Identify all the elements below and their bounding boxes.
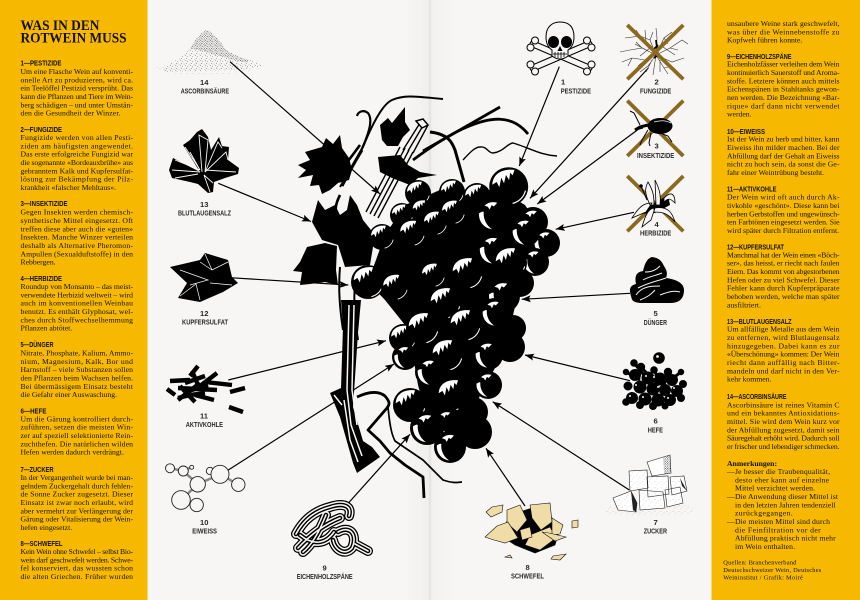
- text block: 10 Eiweiss: Eiweiss ihn milder machen. Bei der: [727, 143, 840, 152]
- text block: 13 Blutlaugensalz: kehr kommen.: [727, 375, 771, 384]
- text block: 1 Pestizide: kann die Pflanzen und Tiere im Wein-: [20, 92, 133, 101]
- label: 9 Eichenholzspäne: 9: [322, 563, 327, 572]
- text block: 5 Dünger: 5—DÜNGER: [20, 340, 54, 349]
- icon: 10 protein molecule: [166, 464, 245, 512]
- text block: 10 Eiweiss: Abfüllung darf der Gehalt an Eiweiss: [727, 151, 840, 160]
- text block: 5 Dünger: den Pflanzen beim Wachsen helfen.: [20, 374, 133, 382]
- text block: 8 Schwefel continued: [727, 19, 840, 45]
- icon: 14 ascorbic acid powder: [155, 30, 264, 75]
- arrow: 8 to grapes: [486, 448, 525, 506]
- text block: 12 Kupfersulfat: ser», das heisst, er riecht nach faulen: [727, 259, 840, 268]
- text block: 10 Eiweiss: Ist der Wein zu herb und bitter, kann: [727, 135, 840, 144]
- text block: 1 Pestizide: Um eine Flasche Wein auf konventi-: [20, 67, 133, 76]
- text block: Anmerkungen: Abfüllung praktisch nicht mehr: [735, 534, 836, 543]
- text block: 4 Herbizide: auch im konventionellen Weinbau: [20, 299, 133, 308]
- text block: 4 Herbizide: [20, 274, 133, 333]
- label: 8 Schwefel: [511, 563, 544, 581]
- text block: 7 Zucker: Gärung oder Vitalisierung der Wein-: [20, 515, 133, 524]
- text block: Anmerkungen: Anmerkungen:: [727, 459, 777, 468]
- label: 7 Zucker: [644, 518, 667, 536]
- text block: 9 Eichenholzspäne: rique» darf dann nicht verwendet: [727, 101, 840, 110]
- text block: 3 Insektizide: Rebbergen.: [20, 258, 56, 267]
- icon: 11 activated charcoal: [167, 366, 245, 412]
- text block: 7 Zucker: hefen eingesetzt.: [20, 523, 72, 532]
- text block: 2 Fungizide: Das erste erfolgreiche Fungizid war: [20, 150, 133, 159]
- text block: 6 Hefe: zuchthefen. Die natürlichen wilden: [20, 439, 133, 448]
- text block: 6 Hefe: Um die Gärung kontrolliert durch-: [20, 414, 133, 423]
- label: 9 Eichenholzspäne: [297, 563, 353, 581]
- text block: 12 Kupfersulfat: behoben werden, welche man später: [727, 292, 840, 301]
- vine trunk: [330, 300, 380, 473]
- text block: 9 Eichenholzspäne: Eichenholzfässer verleihen dem Wein: [727, 60, 840, 69]
- arrow: 1 to grapes: [519, 67, 559, 166]
- label: 3 Insektizide: 3: [654, 142, 659, 150]
- text block: 9 Eichenholzspäne: 9—EICHENHOLZSPÄNE: [727, 52, 792, 61]
- text block: 13 Blutlaugensalz: hinzugegeben. Dabei kann es zur: [727, 341, 840, 350]
- label: 1 Pestizide: [561, 78, 591, 96]
- text block: 3 Insektizide: treffen diese aber auch die «guten»: [20, 224, 133, 233]
- text block: 1 Pestizide: ein Teelöffel Pestizid versprüht. Das: [20, 84, 133, 93]
- text block: Anmerkungen: Je besser die Traubenqualität,: [735, 467, 830, 476]
- label: 13 Blutlaugensalz: [178, 200, 231, 218]
- text block: 6 Hefe: 6—HEFE: [20, 406, 46, 416]
- text block: 1 Pestizide: 1—PESTIZIDE: [20, 58, 62, 68]
- text block: Anmerkungen: desto eher kann auf einzelne: [735, 475, 830, 484]
- text block: 3 Insektizide: deshalb als Alternative Pheromon-: [20, 241, 133, 250]
- arrow: 12 to grapes: [230, 278, 348, 285]
- text block: 1 Pestizide: den die Gesundheit der Winzer.: [20, 109, 121, 118]
- arrow: 9 to grapes: [347, 434, 410, 505]
- text block: 14 Ascorbinsäure: der Abfüllung zugesetzt, damit sein: [727, 425, 840, 434]
- text block: 2 Fungizide: Fungizide werden von allen Pesti-: [20, 133, 133, 142]
- text block: 9 Eichenholzspäne: nen werden. Die Bezeichnung «Bar-: [727, 93, 840, 102]
- text block: 13 Blutlaugensalz: riecht dann auffällig nach Bitter-: [727, 358, 840, 367]
- text block: 4 Herbizide: Roundup von Monsanto – das meist-: [20, 282, 133, 291]
- right yellow text column: [712, 0, 860, 600]
- text block: 8 Schwefel: Kein Wein ohne Schwefel – selbst Bio-: [20, 547, 133, 556]
- label: 3 Insektizide: [637, 142, 674, 160]
- label: 14 Ascorbinsäure: 14: [200, 78, 209, 87]
- text block: 1 Pestizide: [20, 58, 133, 118]
- central illustration: grape vine: [293, 96, 560, 498]
- text block: 4 Herbizide: verwendete Herbizid weltweit – wird: [20, 290, 133, 299]
- text block: 2 Fungizide: 2—FUNGIZIDE: [20, 125, 62, 134]
- icon: 3 insect crossed out: [627, 101, 683, 156]
- text block: 2 Fungizide: gebranntem Kalk und Kupfersulfat-: [20, 166, 133, 175]
- arrow: 4 to grapes: [556, 212, 634, 229]
- text block: 12 Kupfersulfat: Eiern. Das kommt von abgestorbenen: [727, 267, 840, 276]
- text block: 9 Eichenholzspäne: werden.: [727, 110, 752, 119]
- label: 7 Zucker: 7: [654, 518, 658, 527]
- text block: 3 Insektizide: Insekten. Manche Winzer verteilen: [20, 233, 133, 242]
- sources credit: [723, 560, 822, 582]
- text block: 8 Schwefel: die alten Griechen. Früher wurden: [20, 572, 133, 581]
- icon: 4 herb crossed out: [627, 176, 683, 231]
- text block: 6 Hefe: zer auf speziell selektionierte Rein-: [20, 431, 133, 440]
- text block: Anmerkungen: Die Anwendung dieser Mittel ist: [735, 492, 839, 501]
- text block: 14 Ascorbinsäure: 14—ASCORBINSÄURE: [727, 392, 786, 401]
- label: 6 Hefe: HEFE: [648, 425, 663, 434]
- text block: 7 Zucker: [20, 465, 133, 532]
- arrow: 10 to grapes: [228, 364, 394, 470]
- text block: 12 Kupfersulfat: [727, 242, 840, 309]
- text block: 5 Dünger: die Gefahr einer Auswaschung.: [20, 390, 117, 399]
- arrow: 14 to grapes: [230, 62, 380, 194]
- text block: 13 Blutlaugensalz: mandeln und darf nicht in den Ver-: [727, 366, 840, 375]
- label: 4 Herbizide: 4: [654, 220, 660, 229]
- sources credit: Quellen: Branchenverband: [723, 560, 797, 566]
- title: WAS IN DEN: [20, 18, 100, 34]
- icon: 12 copper sulfate crystal: [170, 253, 238, 302]
- text block: 4 Herbizide: 4—HERBIZIDE: [20, 274, 62, 283]
- text block: 12 Kupfersulfat: 12—KUPFERSULFAT: [727, 242, 784, 252]
- text block: 11 Aktivkohle: tivkohle «geschönt». Diese kann bei: [727, 201, 840, 210]
- text block: 5 Dünger: Bei übermässigem Einsatz besteht: [20, 382, 134, 391]
- text block: Anmerkungen: die Feinfiltration vor der: [735, 525, 821, 534]
- text block: 9 Eichenholzspäne: stoffe. Letztere können auch mittels: [727, 76, 840, 85]
- text block: Anmerkungen: —: [726, 467, 735, 476]
- icon: 1 skull and crossbones: [527, 22, 595, 75]
- label: 14 Ascorbinsäure: ASCORBINSÄURE: [181, 87, 229, 96]
- text block: Anmerkungen: Mittel verzichtet werden.: [735, 484, 815, 493]
- text block: 2 Fungizide: lösung zur Bekämpfung der Pilz-: [20, 175, 133, 184]
- text block: Anmerkungen: im Wein enthalten.: [735, 542, 795, 551]
- text block: 3 Insektizide: [20, 199, 134, 267]
- label: 9 Eichenholzspäne: EICHENHOLZSPÄNE: [297, 572, 353, 581]
- text block: 1 Pestizide: onelle Art zu produzieren, wird ca.: [20, 75, 133, 84]
- text block: 2 Fungizide: ziden am häufigsten angewendet.: [20, 141, 133, 150]
- label: 6 Hefe: 6: [654, 417, 658, 426]
- text block: 11 Aktivkohle: Der Wein wird oft auch durch Ak-: [727, 193, 840, 202]
- text block: 11 Aktivkohle: [727, 184, 840, 235]
- text block: 12 Kupfersulfat: Fehler kann durch Kupferpräparate: [727, 284, 840, 293]
- label: 8 Schwefel: SCHWEFEL: [511, 572, 544, 581]
- text block: 3 Insektizide: Gegen Insekten werden chemisch-: [20, 208, 133, 217]
- text block: 4 Herbizide: ches durch Stoffwechselhemmung: [20, 315, 133, 324]
- text block: 14 Ascorbinsäure: und ein bekanntes Antioxidations-: [727, 409, 840, 418]
- text block: Anmerkungen: Die meisten Mittel sind durch: [735, 517, 830, 526]
- text block: 13 Blutlaugensalz: 13—BLUTLAUGENSALZ: [727, 317, 792, 326]
- text block: 6 Hefe: Hefen werden dadurch verdrängt.: [20, 448, 124, 457]
- text block: 8 Schwefel continued: unsaubere Weine stark geschwefelt,: [727, 19, 840, 28]
- text block: 8 Schwefel continued: Kopfweh führen konnte.: [727, 36, 802, 45]
- text block: Anmerkungen: zurückgegangen.: [735, 509, 793, 518]
- text block: 8 Schwefel: 8—SCHWEFEL: [20, 539, 63, 548]
- text block: 11 Aktivkohle: 11—AKTIVKOHLE: [727, 184, 776, 194]
- label: 4 Herbizide: [640, 220, 671, 238]
- arrow: 5 to grapes: [522, 293, 630, 299]
- text block: 7 Zucker: 7—ZUCKER: [20, 465, 54, 474]
- title: ROTWEIN MUSS: [20, 31, 126, 47]
- icon: 2 fungus roots crossed out: [620, 25, 688, 79]
- text block: 10 Eiweiss: [727, 127, 840, 177]
- text block: 14 Ascorbinsäure: mittel. Sie wird dem Wein kurz vor: [727, 417, 840, 426]
- text block: 11 Aktivkohle: ten Farbtönen eingesetzt werden. Sie: [727, 218, 840, 227]
- text block: 14 Ascorbinsäure: Säuregehalt erhöht wird. Dadurch soll: [727, 434, 840, 443]
- text block: Anmerkungen: —: [726, 492, 735, 501]
- text block: 13 Blutlaugensalz: [727, 317, 840, 384]
- text block: 5 Dünger: Harnstoff – viele Substanzen sollen: [20, 365, 133, 374]
- text block: 7 Zucker: Einsatz ist zwar noch erlaubt, wird: [20, 498, 133, 507]
- text block: 8 Schwefel: [20, 539, 133, 581]
- label: 1 Pestizide: 1: [561, 78, 566, 86]
- label: 13 Blutlaugensalz: 13: [200, 200, 208, 209]
- grape cluster: [351, 167, 560, 463]
- label: 5 Dünger: 5: [654, 309, 658, 318]
- text block: 10 Eiweiss: 10—EIWEISS: [727, 127, 765, 136]
- label: 2 Fungizide: FUNGIZIDE: [640, 87, 671, 96]
- arrow: 13 to grapes: [218, 183, 311, 222]
- label: 11 Aktivkohle: 11: [200, 411, 209, 420]
- text block: 7 Zucker: gelndem Zuckergehalt durch fehlen-: [20, 481, 133, 490]
- text block: Anmerkungen: in den letzten Jahren tendenziell: [735, 500, 836, 509]
- label: 10 Eiweiss: [192, 518, 217, 536]
- text block: 2 Fungizide: krankheit «falscher Mehltaus».: [20, 183, 116, 192]
- text block: 7 Zucker: In der Vergangenheit wurde bei man-: [20, 473, 133, 482]
- label: 6 Hefe: [648, 417, 663, 434]
- label: 11 Aktivkohle: [186, 411, 223, 429]
- text block: 7 Zucker: aber vermehrt zur Verlängerung der: [20, 506, 133, 515]
- arrow: 11 to grapes: [228, 341, 386, 380]
- text block: 6 Hefe: zuführen, setzen die meisten Win-: [20, 423, 133, 432]
- arrow: 6 to grapes: [525, 355, 630, 381]
- text block: 11 Aktivkohle: wird später durch Filtration entfernt.: [727, 226, 839, 235]
- text block: 4 Herbizide: Pflanzen abtötet.: [20, 324, 72, 333]
- label: 12 Kupfersulfat: KUPFERSULFAT: [182, 318, 228, 327]
- left yellow text column: [0, 0, 148, 600]
- label: 3 Insektizide: INSEKTIZIDE: [637, 151, 674, 160]
- text block: 2 Fungizide: [20, 125, 133, 192]
- text block: 14 Ascorbinsäure: [727, 392, 840, 451]
- label: 10 Eiweiss: EIWEISS: [192, 527, 217, 536]
- label: 5 Dünger: [644, 309, 667, 327]
- text block: 13 Blutlaugensalz: «Überschönung» kommen: Der Wein: [727, 350, 840, 359]
- label: 14 Ascorbinsäure: [181, 78, 229, 96]
- text block: 5 Dünger: [20, 340, 134, 399]
- arrow: 7 to grapes: [493, 402, 629, 490]
- vine knob: [416, 119, 428, 128]
- text block: 5 Dünger: Nitrate, Phosphate, Kalium, Ammo-: [20, 348, 133, 358]
- text block: 11 Aktivkohle: herben Gerbstoffen und ungewünsch-: [727, 209, 840, 218]
- text block: 8 Schwefel: wein darf geschwefelt werden. Schwe-: [20, 555, 133, 564]
- text block: Anmerkungen: —: [726, 517, 735, 526]
- label: 10 Eiweiss: 10: [200, 518, 208, 527]
- text block: 8 Schwefel: fel konserviert, das wussten schon: [20, 564, 133, 573]
- icon: 8 sulfur chunks: [485, 503, 578, 560]
- text block: Anmerkungen: [726, 459, 839, 551]
- arrow: 3 to grapes: [537, 129, 638, 204]
- arrow: 2 to grapes: [530, 68, 648, 198]
- text block: 4 Herbizide: benutzt. Es enthält Glyphosat, wel-: [20, 307, 133, 316]
- text block: 6 Hefe: [20, 406, 133, 457]
- text block: 10 Eiweiss: nicht zu hoch sein, da sonst die Ge-: [727, 160, 840, 169]
- icon: 13 crystal cluster: [169, 129, 239, 193]
- sources credit: Weininstitut / Grafik: Moiré: [723, 574, 803, 582]
- text block: 5 Dünger: nium, Magnesium, Kalk, Bor und: [20, 357, 133, 366]
- text block: 7 Zucker: de Sonne Zucker zugesetzt. Dieser: [20, 490, 133, 499]
- vine leaves: [298, 135, 352, 194]
- label: 1 Pestizide: PESTIZIDE: [561, 87, 591, 96]
- text block: 9 Eichenholzspäne: kontinuierlich Sauerstoff und Aroma-: [727, 68, 840, 77]
- label: 12 Kupfersulfat: 12: [200, 309, 208, 318]
- text block: 2 Fungizide: die sogenannte «Bordeauxbrühe» aus: [20, 158, 133, 167]
- text block: 8 Schwefel continued: was über die Weinnebenstoffe zu: [727, 27, 840, 36]
- text block: 1 Pestizide: berg schädigen – und unter Umstän-: [20, 100, 133, 109]
- text block: 12 Kupfersulfat: Manchmal hat der Wein einen «Böch-: [727, 250, 840, 259]
- text block: 13 Blutlaugensalz: zu entfernen, wird Blutlaugensalz: [727, 333, 840, 342]
- text block: 12 Kupfersulfat: ausfiltriert.: [727, 300, 761, 309]
- text block: 9 Eichenholzspäne: [727, 52, 840, 119]
- label: 12 Kupfersulfat: [182, 309, 228, 327]
- text block: 12 Kupfersulfat: Hefen oder zu viel Schwefel. Dieser: [727, 275, 840, 284]
- sources credit: Deutschschweizer Wein, Deutsches: [723, 567, 822, 574]
- label: 7 Zucker: ZUCKER: [644, 527, 667, 536]
- label: 13 Blutlaugensalz: BLUTLAUGENSALZ: [178, 209, 231, 218]
- label: 5 Dünger: DÜNGER: [644, 318, 667, 327]
- text block: 14 Ascorbinsäure: Ascorbinsäure ist reines Vitamin C: [727, 400, 840, 409]
- text block: 13 Blutlaugensalz: Um allfällige Metalle aus dem Wein: [727, 325, 840, 334]
- text block: 14 Ascorbinsäure: er frischer und lebendiger schmecken.: [727, 442, 840, 451]
- label: 2 Fungizide: 2: [654, 78, 659, 86]
- text block: 3 Insektizide: synthetische Mittel eingesetzt. Oft: [20, 216, 134, 225]
- label: 8 Schwefel: 8: [526, 563, 530, 572]
- text block: 3 Insektizide: 3—INSEKTIZIDE: [20, 199, 68, 208]
- icon: 9 oak chips: [296, 505, 368, 552]
- title: [20, 18, 126, 47]
- label: 11 Aktivkohle: AKTIVKOHLE: [186, 420, 223, 429]
- icon: 6 yeast: [622, 352, 687, 410]
- text block: 3 Insektizide: Ampullen (Sexualduftstoffe) in den: [20, 249, 133, 258]
- text block: 10 Eiweiss: fahr einer Weintrübung besteht.: [727, 168, 824, 177]
- icon: 5 fertilizer: [630, 257, 684, 303]
- text block: 9 Eichenholzspäne: Eichenspänen in Stahltanks gewon-: [727, 85, 840, 94]
- upper tendril over the leaves: [340, 96, 443, 187]
- label: 4 Herbizide: HERBIZIDE: [640, 229, 671, 238]
- icon: 7 sugar cubes: [604, 455, 696, 517]
- label: 2 Fungizide: [640, 78, 671, 96]
